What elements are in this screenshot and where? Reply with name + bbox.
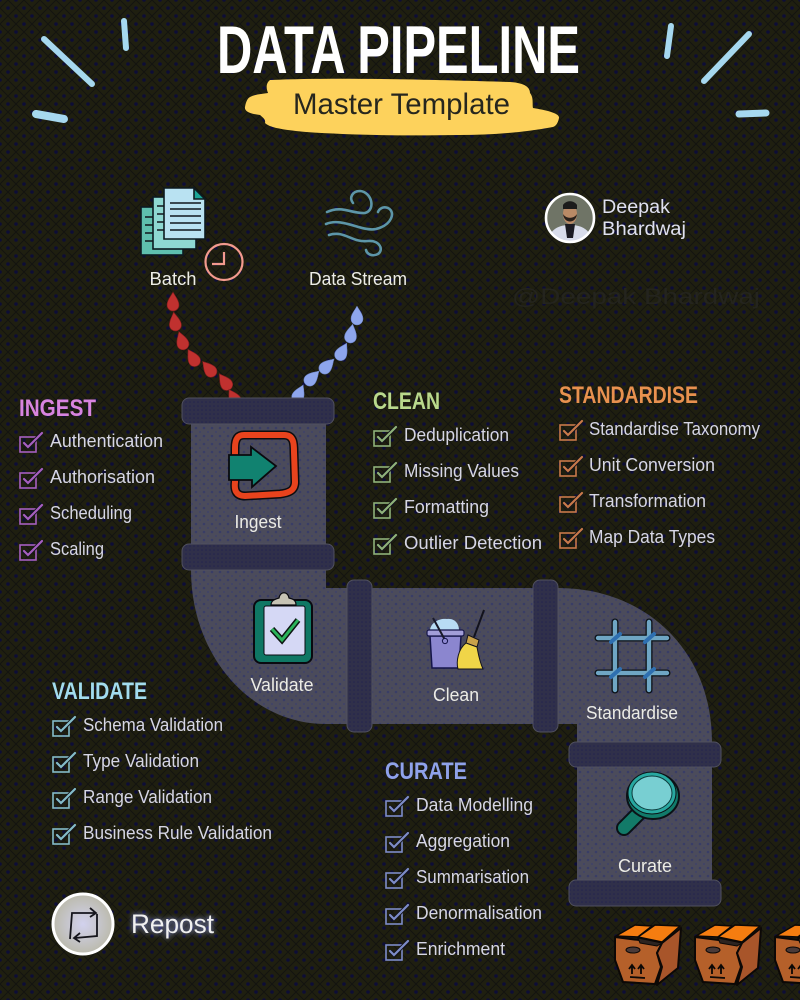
items: Missing Values xyxy=(404,461,519,481)
label: standardise: Standardise xyxy=(586,703,678,723)
icon: boxes xyxy=(615,925,800,985)
drops: batch xyxy=(167,292,244,409)
panel: validate checklist xyxy=(52,678,272,844)
pipeline xyxy=(182,398,721,906)
repost button xyxy=(53,894,214,954)
items: Summarisation xyxy=(416,867,529,887)
repost label: Repost xyxy=(131,909,214,939)
author xyxy=(546,194,686,242)
label: validate: Validate xyxy=(250,675,314,695)
items: Data Modelling xyxy=(416,795,533,815)
items: Enrichment xyxy=(416,939,505,959)
items xyxy=(50,431,163,559)
label: ingest: Ingest xyxy=(234,512,282,532)
heading: clean: CLEAN xyxy=(373,388,440,415)
drops: data stream xyxy=(290,306,363,405)
icon: repost xyxy=(53,894,113,954)
stage: validate xyxy=(250,593,314,695)
pipe body xyxy=(191,410,712,892)
source: data stream xyxy=(309,191,407,289)
items: Authentication xyxy=(50,431,163,451)
items: Schema Validation xyxy=(83,715,223,735)
items: Standardise Taxonomy xyxy=(589,419,760,439)
items: Scheduling xyxy=(50,503,132,523)
decorative burst strokes xyxy=(36,21,766,119)
label: curate: Curate xyxy=(618,856,672,876)
yellow brush blob xyxy=(245,79,559,135)
items: Range Validation xyxy=(83,787,212,807)
watermark: @Deepak Bhardwaj xyxy=(512,284,760,309)
label: clean: Clean xyxy=(433,685,479,705)
icon: hash grid xyxy=(598,622,667,690)
checkboxes xyxy=(374,427,396,554)
checkboxes xyxy=(386,797,408,960)
items xyxy=(404,425,542,553)
items: Type Validation xyxy=(83,751,199,771)
label: data stream: Data Stream xyxy=(309,269,407,289)
items: Aggregation xyxy=(416,831,510,851)
items: Business Rule Validation xyxy=(83,823,272,843)
icon: wind xyxy=(326,191,392,255)
panel: standardise checklist xyxy=(559,382,760,548)
items: Deduplication xyxy=(404,425,509,445)
panel: clean checklist xyxy=(373,388,542,554)
heading: ingest: INGEST xyxy=(19,395,96,422)
items: Scaling xyxy=(50,539,104,559)
subtitle banner xyxy=(245,79,559,135)
items: Transformation xyxy=(589,491,706,511)
heading: validate: VALIDATE xyxy=(52,678,147,705)
items: Denormalisation xyxy=(416,903,542,923)
author name: Deepak xyxy=(602,197,671,218)
stage: standardise xyxy=(586,622,678,723)
icon: documents xyxy=(141,188,205,255)
subtitle text: Master Template xyxy=(293,88,510,121)
icon: bucket and broom xyxy=(427,610,484,669)
label: batch: Batch xyxy=(150,269,196,289)
source: batch xyxy=(141,188,242,289)
icon: clipboard xyxy=(254,593,312,663)
items xyxy=(589,419,760,547)
items xyxy=(83,715,272,843)
items: Formatting xyxy=(404,497,489,517)
title: DATA PIPELINE xyxy=(217,12,580,88)
icon: clock xyxy=(206,244,242,280)
flanges xyxy=(182,398,721,906)
items xyxy=(416,795,542,959)
panel: curate checklist xyxy=(385,758,542,960)
stage: curate xyxy=(618,772,679,876)
items: Outlier Detection xyxy=(404,533,542,553)
items: Authorisation xyxy=(50,467,155,487)
author name xyxy=(602,197,686,240)
checkboxes xyxy=(20,433,42,560)
items: Unit Conversion xyxy=(589,455,715,475)
heading: standardise: STANDARDISE xyxy=(559,382,698,409)
icon: ingest arrow xyxy=(229,435,295,496)
checkboxes xyxy=(560,421,582,548)
author name: Bhardwaj xyxy=(602,219,686,240)
checkboxes xyxy=(53,717,75,844)
items: Map Data Types xyxy=(589,527,715,547)
stage: ingest xyxy=(229,435,295,532)
panel: ingest checklist xyxy=(19,395,163,560)
icon: magnifier xyxy=(624,772,679,828)
heading: curate: CURATE xyxy=(385,758,467,785)
stage: clean xyxy=(427,610,484,705)
avatar xyxy=(546,194,594,242)
